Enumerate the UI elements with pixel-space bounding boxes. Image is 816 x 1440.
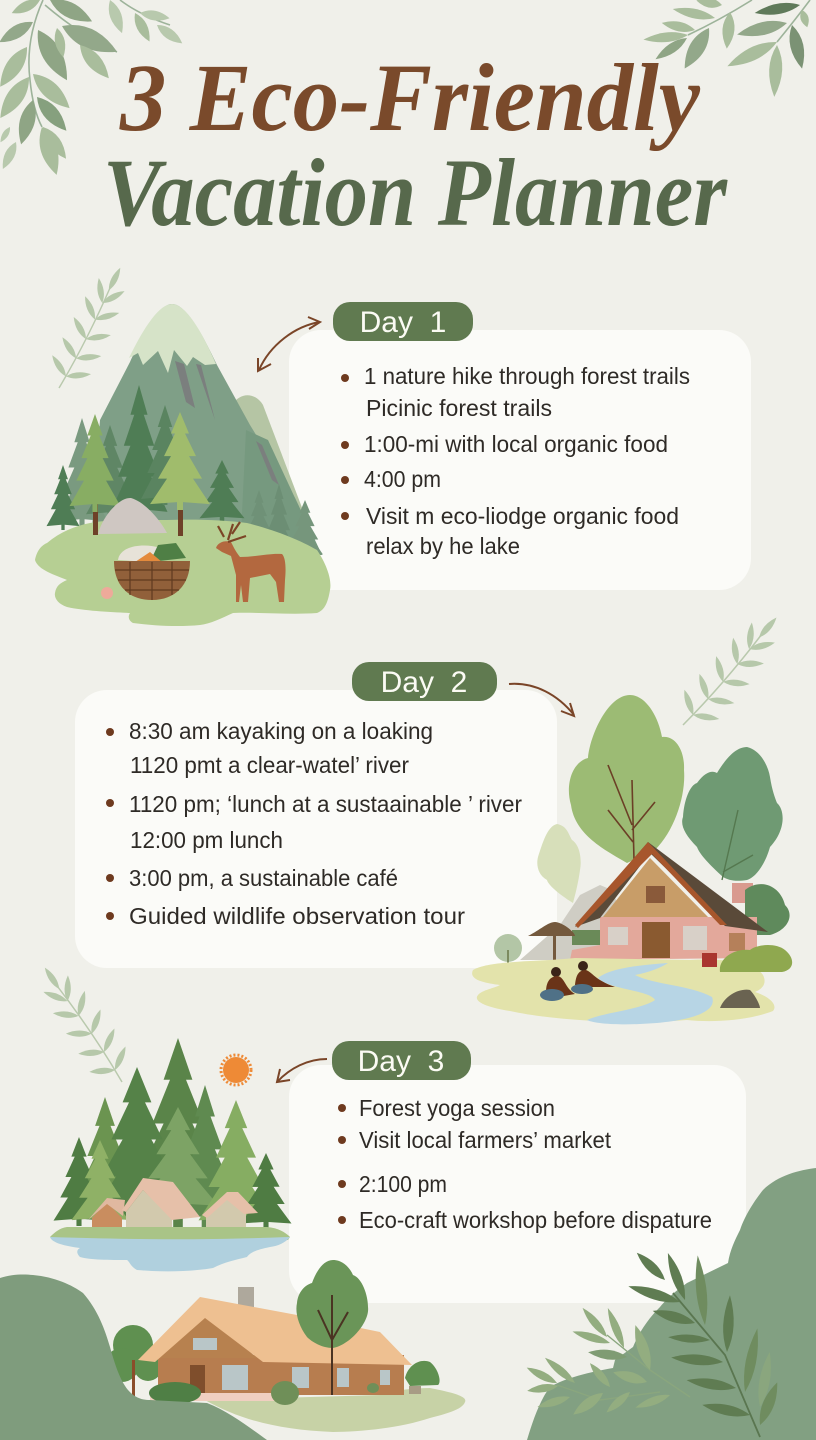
river rock	[720, 990, 760, 1008]
title line 2: Vacation Planner	[103, 139, 728, 246]
cabin wall	[570, 917, 757, 960]
pink wall behind	[732, 883, 753, 903]
roof trim	[575, 842, 727, 928]
large light tree	[569, 695, 684, 863]
lodge gable	[153, 1310, 257, 1358]
day 2 list: 8:30 am kayaking on a loaking	[129, 718, 433, 744]
day 2 heading: Day 2	[381, 666, 467, 699]
day 1 list: 4:00 pm	[364, 466, 441, 492]
foliage: top left corner	[0, 0, 185, 177]
small back mountain	[232, 395, 320, 555]
snow cap	[129, 304, 216, 373]
people	[540, 961, 615, 1001]
bushes	[720, 945, 792, 972]
day 3 pill	[332, 1041, 471, 1080]
day 3 list: Visit local farmers’ market	[359, 1127, 612, 1153]
forest	[54, 1038, 292, 1228]
foliage: bottom right dark branch	[627, 1249, 782, 1437]
day 3 list: 2:100 pm	[359, 1171, 447, 1197]
branch: day 1	[39, 258, 142, 399]
basket	[114, 543, 190, 600]
illustration: mountain, forest, basket and deer	[35, 304, 330, 626]
arrow: day 1	[258, 317, 320, 371]
panel: day 2	[75, 662, 557, 968]
path	[150, 1393, 290, 1401]
foliage: bottom right light branch	[525, 1305, 690, 1419]
panel: day 1	[289, 302, 751, 590]
windows	[608, 927, 628, 945]
small sapling	[494, 934, 522, 966]
day 1 pill	[333, 302, 473, 341]
rock streaks	[175, 361, 279, 485]
day 3 card	[289, 1065, 746, 1303]
title line 1: 3 Eco-Friendly	[119, 44, 700, 151]
foliage: top right corner	[643, 0, 811, 97]
lake	[50, 1237, 290, 1271]
lodge windows	[193, 1338, 390, 1390]
day 1 list: relax by he lake	[366, 533, 520, 559]
illustration: forest lodges on lake	[50, 1038, 292, 1271]
back bush	[745, 884, 790, 935]
pale small tree	[537, 824, 581, 903]
door	[642, 922, 670, 958]
arrow: day 3	[277, 1059, 327, 1082]
day 2 card	[75, 690, 557, 968]
illustration: cabin, trees and river	[472, 695, 792, 1024]
lawn	[205, 1388, 465, 1432]
center lodge	[126, 1190, 172, 1230]
day 2 list: 1120 pmt a clear-watel’ river	[130, 752, 409, 778]
bottom left hill	[0, 1274, 267, 1440]
right bush	[405, 1361, 440, 1394]
day 2 list	[106, 718, 522, 929]
day 2 list: 12:00 pm lunch	[130, 827, 283, 853]
day 1 list: 1 nature hike through forest trails	[364, 363, 690, 389]
day 3 list: Forest yoga session	[359, 1095, 555, 1121]
day 3 list	[338, 1095, 712, 1233]
hill behind cabin	[520, 885, 640, 960]
panel: day 3	[289, 1041, 746, 1303]
day 3 heading: Day 3	[358, 1045, 444, 1078]
lodge door	[190, 1365, 205, 1395]
branch: day 2	[665, 602, 796, 742]
lodge walls	[158, 1355, 404, 1395]
dark tree branches	[722, 810, 753, 880]
day 2 pill	[352, 662, 497, 701]
ground	[35, 520, 330, 626]
cabin roof	[575, 842, 768, 932]
lodges	[88, 1178, 258, 1230]
river	[587, 963, 713, 1024]
gable	[603, 858, 708, 917]
tree	[296, 1260, 368, 1395]
mountain	[90, 304, 322, 555]
mailbox	[702, 953, 717, 967]
day 1 heading: Day 1	[360, 306, 446, 339]
back pines	[46, 385, 323, 558]
branch: day 3	[26, 953, 143, 1095]
island	[50, 1227, 290, 1240]
mountain lower slope shade	[240, 430, 322, 555]
dark round tree	[682, 747, 783, 881]
illustration: bottom lodge	[105, 1260, 465, 1432]
icon: sun	[221, 1055, 251, 1085]
chimney	[238, 1287, 254, 1320]
left bush	[105, 1325, 162, 1396]
arrow: day 2	[509, 684, 574, 716]
umbrella	[528, 922, 575, 962]
right lodge	[206, 1198, 246, 1230]
day 2 list: 3:00 pm, a sustainable café	[129, 865, 398, 891]
flower	[101, 587, 113, 599]
shrubs	[149, 1382, 201, 1404]
tree branches	[608, 765, 655, 860]
title	[103, 44, 728, 246]
day 1 list: 1:00-mi with local organic food	[364, 431, 668, 457]
day 1 list	[341, 363, 690, 559]
day 2 list: Guided wildlife observation tour	[129, 903, 465, 929]
day 1 list: Picinic forest trails	[366, 395, 552, 421]
day 3 list: Eco-craft workshop before dispature	[359, 1207, 712, 1233]
left lodge	[92, 1202, 122, 1228]
day 1 card	[289, 330, 751, 590]
loft window	[646, 886, 665, 903]
day 2 list: 1120 pm; ‘lunch at a sustaainable ’ river	[129, 791, 522, 817]
lodge roof	[138, 1297, 412, 1365]
day 1 list: Visit m eco-liodge organic food	[366, 503, 679, 529]
rock	[98, 498, 167, 534]
ivy	[572, 930, 600, 945]
deer	[216, 522, 286, 602]
ground	[472, 958, 774, 1022]
front pines	[70, 412, 210, 536]
bottom right hill	[527, 1168, 816, 1440]
